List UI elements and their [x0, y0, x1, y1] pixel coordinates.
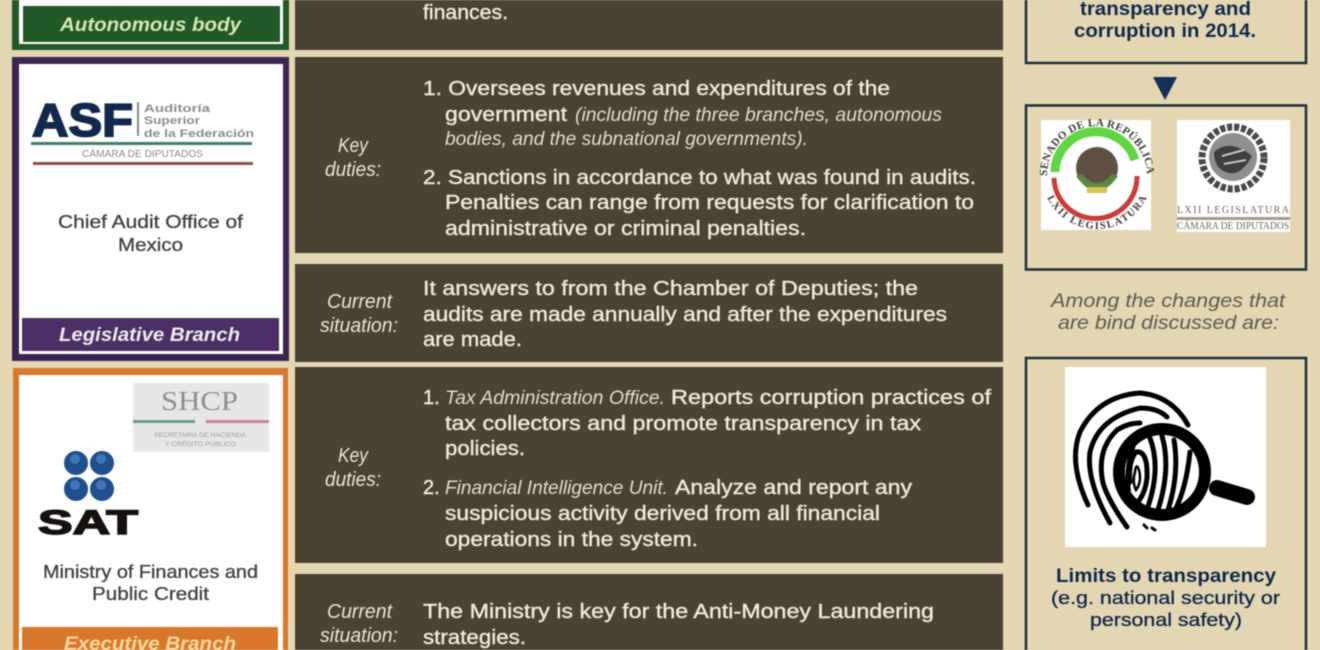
text: limits to transparency [1051, 566, 1280, 630]
logo: senate: LXII LEGISLATURA [1046, 194, 1148, 230]
text: duty 1: tax collectors and promote transparency in tax [445, 413, 921, 435]
logo: SHCP: Y CRÉDITO PÚBLICO [165, 441, 236, 448]
heading: chief audit office [58, 212, 244, 255]
panel: right top callout [1026, 0, 1306, 63]
panel: autonomous body card [12, 0, 289, 50]
label: current situation: Current [327, 291, 393, 313]
text: duty 1: Reports corruption practices of [671, 387, 992, 409]
text: duty 2 [423, 167, 976, 240]
heading: chief audit office: Chief Audit Office of [58, 212, 244, 232]
text: duty 1: 1. [423, 387, 440, 409]
logo: SAT [38, 451, 138, 542]
label: current situation: situation: [320, 625, 398, 647]
logo: chamber of deputies [1177, 120, 1290, 232]
text: duty 2: Financial Intelligence Unit. [445, 478, 668, 499]
logo: senate [1039, 118, 1155, 230]
text: duty 2: operations in the system. [445, 529, 698, 551]
panel: right top callout: corruption in 2014. [1074, 21, 1256, 42]
text: situation: strategies. [423, 627, 526, 649]
label: legislative branch [22, 318, 279, 351]
text: limits to transparency: personal safety) [1090, 610, 1242, 630]
arrow: down triangle [1153, 77, 1177, 100]
panel: limits to transparency [1026, 358, 1306, 650]
logo: senate: SENADO DE LA REPÚBLICA [1039, 118, 1155, 176]
panel: SHCP key duties [295, 367, 1003, 563]
heading: ministry of finances: Public Credit [92, 584, 209, 604]
text: duty 1 [423, 78, 942, 150]
text: duty 2: Analyze and report any [675, 477, 912, 499]
icon: fingerprint under magnifying glass [1065, 367, 1266, 547]
logo: ASF: Superior [144, 115, 201, 127]
heading: ministry of finances [43, 562, 258, 604]
panel: congress logos [1024, 104, 1308, 272]
text: duty 1: bodies, and the subnational governments). [445, 129, 808, 150]
text: duty 2: 2. Sanctions in accordance to what was found in audits. [423, 167, 976, 189]
label: current situation: situation: [320, 315, 398, 337]
text: duty 1 [423, 387, 992, 460]
logo: ASF: Auditoría [144, 103, 211, 115]
text: duty 2: 2. [423, 477, 440, 499]
label: executive branch [22, 627, 278, 650]
panel: ASF current situation [295, 264, 1003, 362]
text: duty 1: 1. Oversees revenues and expenditures of the [423, 78, 890, 100]
text: duty 2: suspicious activity derived from all financial [445, 503, 880, 525]
text: changes intro [1050, 291, 1286, 334]
text: situation: audits are made annually and after the expenditures [423, 304, 947, 326]
label: key duties: duties: [325, 469, 381, 491]
label: key duties: Key [338, 135, 369, 157]
text: situation [423, 278, 947, 351]
text: changes intro: Among the changes that [1050, 291, 1286, 312]
text: duty 2: administrative or criminal penalties. [445, 218, 806, 240]
text: situation: The Ministry is key for the Anti-Money Laundering [423, 601, 934, 623]
text: situation: It answers to from the Chamber of Deputies; the [423, 278, 918, 300]
text: changes intro: are bind discussed are: [1058, 313, 1279, 334]
logo: SHCP: SHCP [161, 386, 238, 416]
logo: chamber of deputies: CÁMARA DE DIPUTADOS [1177, 220, 1289, 232]
logo: ASF: ASF [32, 94, 133, 146]
logo: ASF: CÁMARA DE DIPUTADOS [82, 147, 203, 160]
label: current situation [320, 291, 398, 337]
label: key duties: duties: [325, 159, 381, 181]
text: limits to transparency: Limits to transparency [1056, 566, 1276, 587]
text: duty 1: government [445, 104, 568, 126]
text: duty 2: Penalties can range from requests for clarification to [445, 192, 974, 214]
logo: SHCP: SECRETARÍA DE HACIENDA [154, 432, 246, 439]
heading: ministry of finances: Ministry of Finances and [43, 562, 258, 582]
text: situation: are made. [423, 329, 522, 351]
label: current situation [320, 601, 398, 647]
logo: SHCP [133, 383, 269, 452]
panel: SHCP card [13, 368, 288, 650]
label: key duties: Key [338, 445, 369, 467]
label: autonomous body: Autonomous body [59, 15, 243, 36]
label: current situation: Current [327, 601, 393, 623]
panel: ASF card [12, 57, 289, 361]
label: key duties [325, 135, 381, 181]
text: duty 1: (including the three branches, autonomous [575, 105, 942, 126]
logo: ASF: de la Federación [144, 128, 254, 140]
heading: chief audit office: Mexico [118, 235, 183, 255]
panel: autonomous body description [295, 0, 1003, 50]
text: duty 1: policies. [445, 438, 525, 460]
text: situation [423, 601, 934, 649]
logo: chamber of deputies: LXII LEGISLATURA [1177, 205, 1290, 216]
label: autonomous body [23, 6, 280, 42]
panel: ASF key duties [295, 57, 1003, 253]
text: duty 2 [423, 477, 912, 551]
logo: ASF [31, 94, 254, 165]
text: duty 1: Tax Administration Office. [445, 388, 665, 409]
label: legislative branch: Legislative Branch [59, 325, 240, 346]
panel: autonomous body description: finances. [423, 2, 508, 24]
label: key duties [325, 445, 381, 491]
logo: SAT: SAT [38, 504, 138, 542]
text: limits to transparency: (e.g. national security or [1051, 588, 1280, 608]
panel: SHCP current situation [295, 574, 1003, 650]
